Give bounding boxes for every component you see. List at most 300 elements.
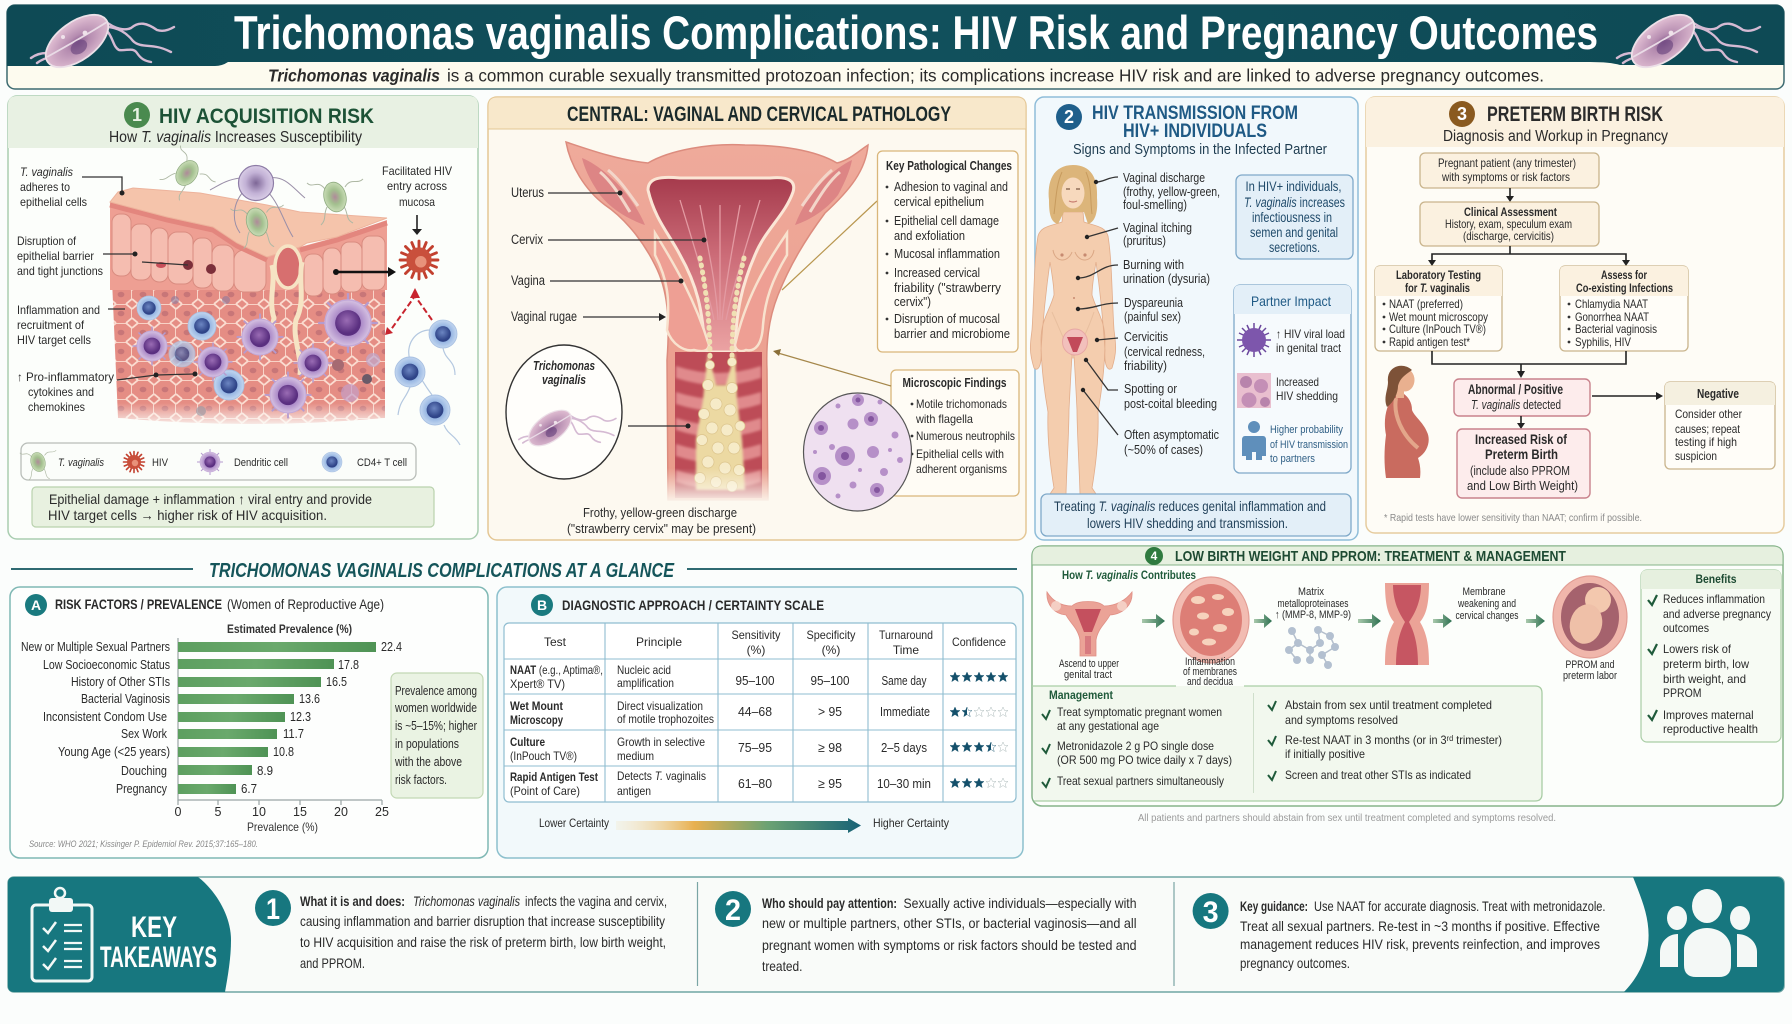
- box: key pathological changes: Adhesion to vaginal and: [894, 179, 1008, 194]
- callout: HIV+ individuals: In HIV+ individuals,: [1246, 179, 1342, 194]
- takeaway 1: [255, 890, 667, 971]
- table: diagnostic tests: Wet Mount: [510, 699, 563, 713]
- subtitle: Trichomonas vaginalis: [268, 66, 440, 86]
- arrows: red dashed: [385, 288, 432, 335]
- box: benefits: and adverse pregnancy: [1663, 607, 1771, 621]
- bar chart: prevalence: Young Age (<25 years): [58, 745, 170, 759]
- box: key pathological changes: cervical epithelium: [894, 194, 984, 209]
- labels: symptoms: friability): [1124, 358, 1167, 373]
- box: key pathological changes: Disruption of mucosal: [894, 311, 1000, 326]
- subtitle: is a common curable sexually transmitted protozoan infection; its complications increase HIV risk and are linked to adverse pregnancy outcomes.: [447, 66, 1544, 86]
- inset: trichomonas circle: [506, 345, 690, 479]
- box: partner impact: in genital tract: [1276, 341, 1342, 355]
- table: diagnostic tests: Growth in selective: [617, 735, 705, 749]
- flow: coexisting infections: Syphilis, HIV: [1575, 335, 1631, 349]
- callout: HIV+ individuals: T. vaginalis increases: [1244, 195, 1345, 210]
- label: inflammation: recruitment of: [17, 318, 85, 332]
- box: microscopic findings: Motile trichomonads: [916, 397, 1007, 411]
- step: fetus: [1553, 576, 1627, 682]
- step: inflammation: of membranes: [1183, 666, 1237, 678]
- bar chart: prevalence: 12.3: [290, 709, 311, 724]
- certainty scale: [539, 816, 949, 833]
- header banner: [7, 4, 1784, 89]
- table: diagnostic tests: (%): [822, 643, 840, 657]
- takeaways badge: [8, 877, 231, 992]
- connector: pathological changes: [782, 201, 877, 290]
- step: inflammation: and decidua: [1187, 676, 1234, 688]
- box: key pathological changes: Epithelial cell damage: [894, 213, 999, 228]
- labels: symptoms: (painful sex): [1124, 309, 1181, 324]
- box: key pathological changes: cervix"): [894, 294, 931, 309]
- table: diagnostic tests: [504, 623, 1016, 802]
- legend: [20, 443, 416, 480]
- label: vaginal rugae: [511, 309, 666, 324]
- flow: abnormal positive: Abnormal / Positive: [1468, 382, 1563, 397]
- table: diagnostic tests: Xpert® TV): [510, 677, 565, 691]
- bar chart: prevalence: Estimated Prevalence (%): [227, 622, 352, 636]
- labels: symptoms: (frothy, yellow-green,: [1123, 184, 1220, 199]
- box: partner impact: [1234, 285, 1351, 473]
- flow: increased risk: [1457, 429, 1590, 498]
- step: MMP: metalloproteinases: [1278, 598, 1349, 610]
- illustration: epithelial tissue: [104, 143, 394, 429]
- box: benefits: birth weight, and: [1663, 672, 1746, 686]
- table: diagnostic tests: Immediate: [880, 704, 930, 719]
- step: ascend: genital tract: [1064, 669, 1112, 681]
- source note: Source: WHO 2021; Kissinger P. Epidemiol Rev. 2015;37:165–180.: [29, 839, 258, 850]
- bar chart: prevalence: New or Multiple Sexual Partners: [21, 640, 170, 654]
- step: membrane: cervical changes: [1456, 610, 1519, 622]
- table: diagnostic tests: 2–5 days: [881, 740, 927, 755]
- callout: prevalence note: women worldwide: [394, 701, 477, 715]
- arrow: to assessment: [1506, 188, 1514, 202]
- table: diagnostic tests: 61–80: [738, 776, 772, 791]
- box: benefits: Lowers risk of: [1663, 642, 1732, 656]
- legend: HIV: [152, 457, 169, 469]
- box: partner impact: Higher probability: [1270, 424, 1343, 436]
- arrow 3: [1358, 614, 1381, 628]
- footnote: * Rapid tests have lower sensitivity than NAAT; confirm if possible.: [1384, 512, 1642, 524]
- flow: negative: [1665, 382, 1775, 469]
- table: diagnostic tests: antigen: [617, 784, 651, 798]
- inset: trichomonas circle: Trichomonas: [533, 358, 595, 373]
- bar chart: prevalence: 22.4: [381, 639, 402, 654]
- callout: HIV+ individuals: secretions.: [1269, 240, 1320, 255]
- heading: panel 1: HIV ACQUISITION RISK: [159, 105, 374, 128]
- flow: negative: Negative: [1697, 386, 1739, 401]
- box: microscopic findings: Epithelial cells with: [916, 447, 1004, 461]
- arrow: microscopic connector: [773, 349, 891, 386]
- box: partner impact: Partner Impact: [1251, 293, 1331, 309]
- label: adhesion: [20, 165, 124, 209]
- box: microscopic findings: with flagella: [915, 412, 973, 426]
- labels: symptoms: [1076, 170, 1220, 457]
- step: inflammation: Inflammation: [1185, 656, 1235, 668]
- label: inflammation: [17, 303, 125, 347]
- flow: coexisting infections: Assess for: [1601, 268, 1647, 282]
- label: cytokines: [17, 370, 198, 414]
- table: diagnostic tests: 95–100: [810, 673, 850, 688]
- table: diagnostic tests: 10–30 min: [877, 776, 931, 791]
- table: diagnostic tests: (%): [747, 643, 765, 657]
- label: cervix: Cervix: [511, 232, 543, 247]
- panel 4: treatment and management: [1032, 546, 1783, 806]
- box: microscopic findings: [891, 370, 1019, 496]
- table: diagnostic tests: Turnaround: [879, 628, 933, 642]
- table: diagnostic tests: Microscopy: [510, 713, 563, 727]
- flow: coexisting infections: [1560, 266, 1688, 351]
- box: partner impact: HIV shedding: [1276, 389, 1338, 403]
- callout: prevalence note: in populations: [395, 737, 459, 751]
- bar chart: prevalence: Prevalence (%): [247, 820, 318, 834]
- bar chart: prevalence: History of Other STIs: [71, 675, 170, 689]
- table: diagnostic tests: Rapid Antigen Test: [510, 770, 598, 784]
- table: diagnostic tests: Detects T. vaginalis: [617, 769, 706, 783]
- table: diagnostic tests: 75–95: [738, 740, 772, 755]
- certainty scale: Lower Certainty: [539, 816, 609, 830]
- labels: symptoms: (~50% of cases): [1124, 442, 1203, 457]
- table: diagnostic tests: 44–68: [738, 704, 772, 719]
- takeaway 1: to HIV acquisition and raise the risk of preterm birth, low birth weight,: [300, 934, 666, 950]
- box: management: Abstain from sex until treatment completed: [1285, 698, 1492, 712]
- table: diagnostic tests: Time: [893, 643, 919, 657]
- flow: start box: Pregnant patient (any trimester): [1438, 156, 1576, 170]
- table: diagnostic tests: 95–100: [736, 673, 774, 688]
- flow: abnormal positive: T. vaginalis detected: [1471, 397, 1561, 412]
- heading: panel 2: Signs and Symptoms in the Infected Partner: [1073, 142, 1327, 158]
- flow: increased risk: Increased Risk of: [1475, 431, 1567, 447]
- box: key pathological changes: [878, 151, 1018, 352]
- arrow: entry: [333, 267, 396, 277]
- heading: central: CENTRAL: VAGINAL AND CERVICAL PATHOLOGY: [567, 103, 951, 126]
- flow: negative: Consider other: [1675, 407, 1742, 421]
- table: diagnostic tests: Culture: [510, 735, 545, 749]
- arrow 4: [1433, 614, 1452, 628]
- bar chart: prevalence: 6.7: [241, 781, 257, 796]
- box: microscopic findings: Numerous neutrophils: [916, 429, 1015, 443]
- labels: symptoms: Often asymptomatic: [1124, 427, 1219, 442]
- box: benefits: Improves maternal: [1663, 708, 1754, 722]
- label: cytokines: chemokines: [28, 400, 85, 414]
- box: partner impact: to partners: [1270, 453, 1315, 465]
- caption: discharge: Frothy, yellow-green discharge: [583, 505, 737, 520]
- bar chart: prevalence: Douching: [121, 764, 167, 778]
- callout: treating: lowers HIV shedding and transmission.: [1087, 515, 1288, 531]
- label: barrier disruption: [17, 234, 138, 278]
- label: barrier disruption: epithelial barrier: [17, 249, 94, 263]
- step: MMP: [1275, 586, 1351, 669]
- legend: CD4+ T cell: [357, 457, 407, 469]
- takeaway 3: [1193, 893, 1606, 971]
- icon: viral load: [1237, 323, 1271, 357]
- confidence stars: [950, 672, 1008, 788]
- heading: A: [25, 594, 384, 616]
- box: benefits: Benefits: [1696, 572, 1737, 586]
- heading: B: B: [537, 597, 547, 613]
- step: MMP: Matrix: [1298, 586, 1324, 598]
- bar chart: prevalence: Inconsistent Condom Use: [43, 710, 167, 724]
- takeaway 2: Who should pay attention:: [762, 895, 897, 911]
- table: diagnostic tests: Confidence: [952, 635, 1006, 649]
- flow: lab testing: [1375, 266, 1502, 351]
- flow: lab testing: Culture (InPouch TV®): [1389, 322, 1486, 336]
- box: key pathological changes: Key Pathological Changes: [886, 158, 1012, 173]
- labels: symptoms: Burning with: [1123, 257, 1184, 272]
- flow: start box: [1420, 153, 1599, 188]
- takeaway 2: 2: [725, 894, 741, 927]
- box: benefits: outcomes: [1663, 621, 1709, 635]
- bar chart: prevalence: 8.9: [257, 763, 273, 778]
- callout: prevalence note: risk factors.: [395, 773, 447, 787]
- certainty scale: Higher Certainty: [873, 816, 949, 830]
- callout: summary: [32, 487, 434, 527]
- callout: prevalence note: with the above: [394, 755, 462, 769]
- subheading: contributes: How T. vaginalis Contributes: [1062, 568, 1196, 582]
- label: cytokines: cytokines and: [28, 385, 94, 399]
- heading: panel 4: 4: [1151, 549, 1158, 563]
- takeaway 2: pregnant women with symptoms or risk factors should be tested and: [762, 937, 1136, 953]
- box: benefits: reproductive health: [1663, 722, 1758, 736]
- bar chart: prevalence: 17.8: [338, 657, 359, 672]
- icon: trichomonad left: [31, 4, 174, 78]
- callout: treating: [1041, 494, 1351, 536]
- labels: symptoms: Vaginal itching: [1123, 220, 1192, 235]
- bar chart: prevalence: Pregnancy: [116, 782, 168, 796]
- box: key pathological changes: Increased cervical: [894, 265, 980, 280]
- table: diagnostic tests: (InPouch TV®): [510, 749, 577, 763]
- flow: abnormal positive: [1454, 379, 1590, 416]
- box: management: and symptoms resolved: [1285, 713, 1398, 727]
- label: facilitated HIV entry: mucosa: [399, 195, 435, 209]
- label: facilitated HIV entry: [382, 164, 452, 235]
- table: diagnostic tests: ≥ 98: [818, 740, 842, 755]
- box: microscopic findings: adherent organisms: [916, 462, 1007, 476]
- illustration: pregnant woman: [1384, 366, 1429, 478]
- icon: clipboard: [32, 888, 92, 981]
- box: management: (OR 500 mg PO twice daily x 7 days): [1057, 753, 1232, 767]
- box: management: at any gestational age: [1057, 719, 1159, 733]
- flow: lab testing: Rapid antigen test*: [1389, 335, 1470, 349]
- takeaway 1: causing inflammation and barrier disruption that increase susceptibility: [300, 913, 665, 929]
- key takeaways bar: [8, 877, 1784, 992]
- takeaway 2: Sexually active individuals—especially with: [904, 895, 1136, 911]
- takeaway 1: Trichomonas vaginalis: [413, 893, 520, 909]
- labels: symptoms: Dyspareunia: [1124, 295, 1184, 310]
- arrow 1: [1142, 614, 1165, 628]
- takeaway 2: treated.: [762, 958, 802, 974]
- flow: coexisting infections: Gonorrhea NAAT: [1575, 310, 1650, 324]
- takeaway 1: infects the vagina and cervix,: [525, 893, 667, 909]
- bar chart: prevalence: Low Socioeconomic Status: [43, 658, 170, 672]
- arrow: to negative: [1592, 392, 1663, 400]
- step: cervix: [1385, 583, 1429, 665]
- labels: symptoms: Spotting or: [1124, 381, 1178, 396]
- panel: HIV transmission: [1030, 97, 1358, 540]
- heading: panel 2: [1056, 102, 1327, 158]
- heading: panel 3: PRETERM BIRTH RISK: [1487, 103, 1663, 126]
- bar chart: prevalence: 11.7: [283, 726, 304, 741]
- flow: negative: testing if high: [1675, 435, 1737, 449]
- flow: clinical assessment: Clinical Assessment: [1464, 205, 1557, 219]
- callout: summary: Epithelial damage + inflammation ↑ viral entry and provide: [49, 491, 372, 507]
- bar chart: prevalence: 10.8: [273, 744, 294, 759]
- takeaway 1: What it is and does:: [300, 893, 405, 909]
- step: membrane: [1456, 586, 1519, 622]
- section heading: TRICHOMONAS VAGINALIS COMPLICATIONS AT A GLANCE: [209, 560, 675, 582]
- step: MMP: ↑ (MMP-8, MMP-9): [1275, 609, 1351, 621]
- table: diagnostic tests: Test: [544, 635, 567, 649]
- labels: symptoms: Cervicitis: [1124, 329, 1168, 344]
- label: barrier disruption: and tight junctions: [17, 264, 103, 278]
- heading: B: [531, 594, 824, 616]
- panel: HIV acquisition risk: [8, 96, 478, 539]
- labels: symptoms: foul-smelling): [1123, 197, 1187, 212]
- label: cytokines: ↑ Pro-inflammatory: [17, 370, 114, 384]
- flow: lab testing: Wet mount microscopy: [1389, 310, 1488, 324]
- box: key pathological changes: Mucosal inflammation: [894, 246, 1000, 261]
- caption: discharge: ("strawberry cervix" may be present): [567, 521, 756, 536]
- box: management: Treat symptomatic pregnant women: [1057, 705, 1222, 719]
- table: diagnostic tests: Specificity: [806, 628, 856, 642]
- step: ascend: [1047, 592, 1132, 681]
- table: diagnostic tests: Principle: [636, 635, 682, 649]
- box: partner impact: Increased: [1276, 375, 1319, 389]
- label: uterus: [511, 185, 622, 200]
- flow: start box: with symptoms or risk factors: [1441, 170, 1570, 184]
- labels: symptoms: post-coital bleeding: [1124, 396, 1217, 411]
- flow: coexisting infections: Chlamydia NAAT: [1575, 297, 1649, 311]
- legend: T. vaginalis: [58, 457, 104, 469]
- caption: discharge: [567, 505, 756, 536]
- arrow 5: [1526, 614, 1545, 628]
- box: management: Management: [1049, 688, 1113, 702]
- bar chart: prevalence: 25: [375, 805, 389, 819]
- takeaway 2: [715, 891, 1136, 974]
- step: membrane: Membrane: [1462, 586, 1506, 598]
- box: benefits: PPROM: [1663, 686, 1702, 700]
- icon: person: [1242, 421, 1266, 460]
- bar chart: prevalence: Sex Work: [121, 727, 168, 741]
- box: partner impact: of HIV transmission: [1270, 439, 1348, 451]
- box: benefits: Reduces inflammation: [1663, 592, 1765, 606]
- box: benefits: preterm birth, low: [1663, 657, 1749, 671]
- cells: CD4 T cells outside: [395, 320, 460, 445]
- callout: summary: HIV target cells → higher risk of HIV acquisition.: [48, 507, 327, 523]
- arrows: split: [1428, 246, 1630, 266]
- heading: panel 2: HIV TRANSMISSION FROM: [1092, 102, 1298, 124]
- panel A: risk factors: [10, 587, 488, 858]
- takeaway 3: Treat all sexual partners. Re-test in ~3 months if positive. Effective: [1240, 918, 1600, 934]
- table: diagnostic tests: ≥ 95: [818, 776, 842, 791]
- flow: clinical assessment: (discharge, cervicitis): [1463, 229, 1554, 243]
- box: management: Treat sexual partners simultaneously: [1057, 774, 1224, 788]
- labels: symptoms: urination (dysuria): [1123, 271, 1210, 286]
- legend: Dendritic cell: [234, 457, 288, 469]
- label: adhesion: adheres to: [20, 180, 70, 194]
- table: diagnostic tests: medium: [617, 749, 654, 763]
- takeaways badge: TAKEAWAYS: [100, 941, 217, 974]
- labels: symptoms: (pruritus): [1123, 233, 1166, 248]
- illustration: uterus and vagina: [566, 142, 868, 504]
- table: diagnostic tests: amplification: [617, 676, 674, 690]
- heading: panel 1: 1: [132, 105, 142, 125]
- heading: A: (Women of Reproductive Age): [227, 597, 384, 612]
- flow: coexisting infections: Bacterial vaginosis: [1575, 322, 1657, 336]
- takeaway 3: Use NAAT for accurate diagnosis. Treat with metronidazole.: [1314, 898, 1606, 914]
- box: management: Re-test NAAT in 3 months (or in 3ʳᵈ trimester): [1285, 733, 1502, 747]
- step: membrane: weakening and: [1457, 598, 1516, 610]
- takeaway 3: management reduces HIV risk, prevents reinfection, and improves: [1240, 936, 1600, 952]
- takeaways badge: KEY: [131, 911, 177, 944]
- table: diagnostic tests: NAAT (e.g., Aptima®,: [510, 663, 603, 677]
- flow: increased risk: and Low Birth Weight): [1467, 478, 1578, 493]
- label: inflammation: Inflammation and: [17, 303, 100, 317]
- heading: A: A: [31, 597, 41, 613]
- label: adhesion: T. vaginalis: [20, 165, 73, 179]
- takeaway 3: Key guidance:: [1240, 898, 1308, 914]
- flow: increased risk: Preterm Birth: [1485, 446, 1558, 462]
- bar chart: prevalence: 0: [175, 805, 182, 819]
- step: fetus: PPROM and: [1566, 659, 1614, 671]
- callout: prevalence note: Prevalence among: [395, 684, 477, 698]
- takeaway 2: new or multiple partners, other STIs, or bacterial vaginosis—and all: [762, 915, 1136, 931]
- heading: panel 4: LOW BIRTH WEIGHT AND PPROM: TREATMENT & MANAGEMENT: [1175, 548, 1566, 565]
- box: management: Screen and treat other STIs as indicated: [1285, 768, 1471, 782]
- badge: people: [1624, 877, 1784, 992]
- box: microscopic findings: Microscopic Findings: [902, 375, 1006, 390]
- flow: lab testing: Laboratory Testing: [1396, 268, 1481, 282]
- label: uterus: Uterus: [511, 185, 544, 200]
- takeaway 3: 3: [1203, 896, 1219, 929]
- bar chart: prevalence: [21, 622, 402, 834]
- bar chart: prevalence: 5: [215, 805, 222, 819]
- label: barrier disruption: Disruption of: [17, 234, 77, 248]
- labels: symptoms: (cervical redness,: [1124, 344, 1205, 359]
- box: management: if initially positive: [1285, 747, 1365, 761]
- callout: treating: Treating T. vaginalis reduces genital inflammation and: [1054, 498, 1326, 514]
- step: fetus: preterm labor: [1563, 670, 1617, 682]
- label: inflammation: HIV target cells: [17, 333, 91, 347]
- heading: panel 1: How T. vaginalis Increases Susceptibility: [109, 129, 362, 146]
- callout: prevalence note: [391, 673, 483, 798]
- flow: lab testing: for T. vaginalis: [1405, 281, 1470, 295]
- inset: microscopic view: [804, 393, 912, 511]
- callout: HIV+ individuals: infectiousness in: [1252, 210, 1332, 225]
- label: adhesion: epithelial cells: [20, 195, 87, 209]
- flow: clinical assessment: [1420, 202, 1599, 246]
- box: management: Metronidazole 2 g PO single dose: [1057, 739, 1214, 753]
- table: diagnostic tests: of motile trophozoites: [617, 712, 714, 726]
- table: diagnostic tests: Direct visualization: [617, 699, 703, 713]
- table: diagnostic tests: Nucleic acid: [617, 663, 671, 677]
- heading: panel 3: Diagnosis and Workup in Pregnancy: [1443, 128, 1668, 145]
- heading: panel 2: 2: [1064, 107, 1074, 127]
- flow: negative: suspicion: [1675, 449, 1717, 463]
- bar chart: prevalence: Bacterial Vaginosis: [81, 692, 170, 706]
- label: cervix: [511, 232, 706, 247]
- box: management: [1032, 686, 1542, 801]
- box: key pathological changes: and exfoliation: [894, 228, 965, 243]
- label: facilitated HIV entry: entry across: [387, 179, 447, 193]
- callout: prevalence note: is ~5–15%; higher: [395, 719, 477, 733]
- takeaway 1: 1: [266, 893, 280, 926]
- box: key pathological changes: barrier and microbiome: [894, 326, 1010, 341]
- table: diagnostic tests: Same day: [882, 673, 927, 688]
- heading: panel 1: [109, 102, 374, 146]
- table: diagnostic tests: > 95: [818, 704, 842, 719]
- label: vaginal rugae: Vaginal rugae: [511, 309, 577, 324]
- flow: coexisting infections: Co-existing Infections: [1576, 281, 1673, 295]
